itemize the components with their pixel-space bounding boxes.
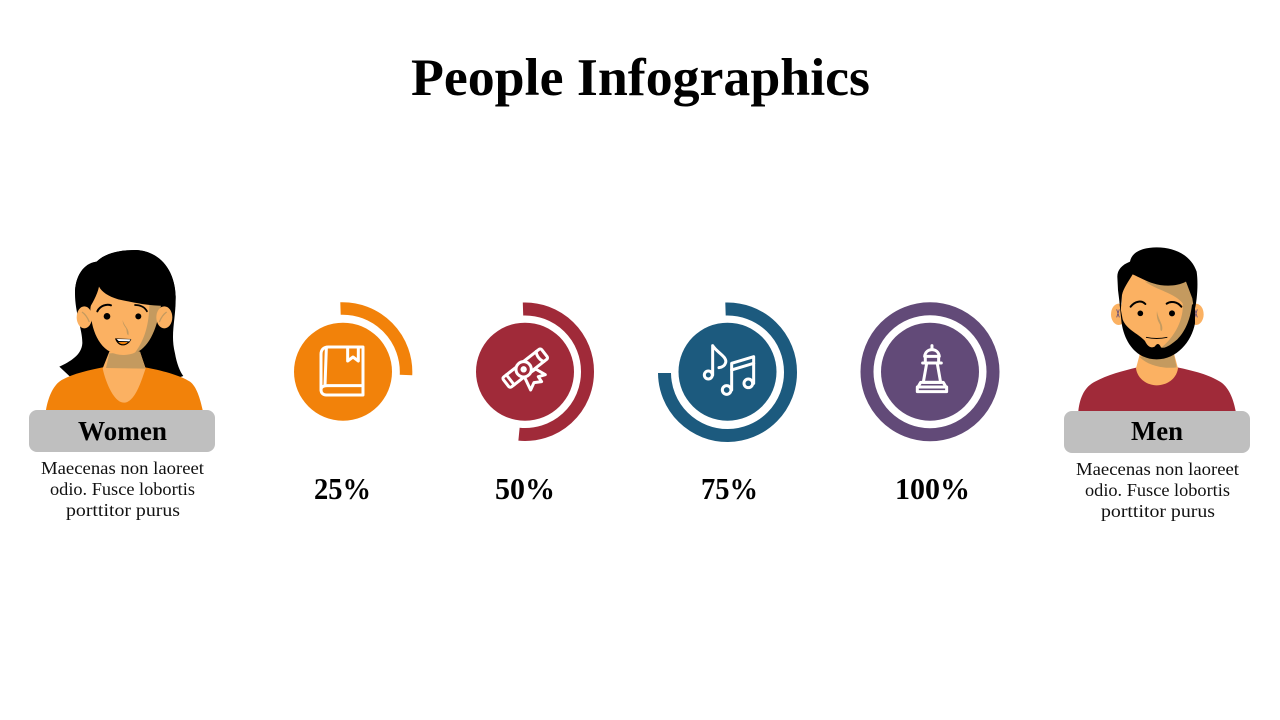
progress arc: 75 percent <box>664 309 791 436</box>
text: women description <box>41 458 204 520</box>
label: men: Men <box>1131 416 1183 446</box>
text: men description: odio. Fusce lobortis <box>1085 480 1230 500</box>
panel: 100 percent <box>867 309 993 506</box>
title: People Infographics <box>411 49 870 107</box>
panel: men <box>1064 247 1250 521</box>
icon: chess piece <box>917 346 947 392</box>
panel: 25 percent <box>294 308 406 506</box>
icon: music notes <box>704 346 754 394</box>
text: women description: porttitor purus <box>66 500 180 520</box>
text: men description: porttitor purus <box>1101 501 1215 521</box>
disc: red <box>476 323 574 421</box>
label: women <box>29 410 215 452</box>
text: women description: odio. Fusce lobortis <box>50 479 195 499</box>
icon: diploma <box>502 348 548 390</box>
progress ring: 100 percent <box>867 309 993 435</box>
disc: purple <box>881 323 979 421</box>
text: men description <box>1076 459 1239 521</box>
panel: women <box>29 250 215 520</box>
illustration: man <box>1078 247 1236 411</box>
label: women: Women <box>78 416 167 446</box>
icon: book <box>321 347 363 395</box>
percent: 75: 75% <box>701 471 758 506</box>
percent: 100: 100% <box>895 471 970 506</box>
text: women description: Maecenas non laoreet <box>41 458 204 478</box>
percent: 50: 50% <box>495 471 555 506</box>
disc: blue <box>678 323 776 421</box>
percent: 25: 25% <box>314 471 371 506</box>
panel: 75 percent <box>664 309 791 506</box>
disc: orange <box>294 323 392 421</box>
label: men <box>1064 411 1250 453</box>
progress arc: 50 percent <box>519 309 588 434</box>
panel: 50 percent <box>476 309 588 506</box>
illustration: woman <box>46 250 203 410</box>
progress arc: 25 percent <box>340 308 406 375</box>
text: men description: Maecenas non laoreet <box>1076 459 1239 479</box>
